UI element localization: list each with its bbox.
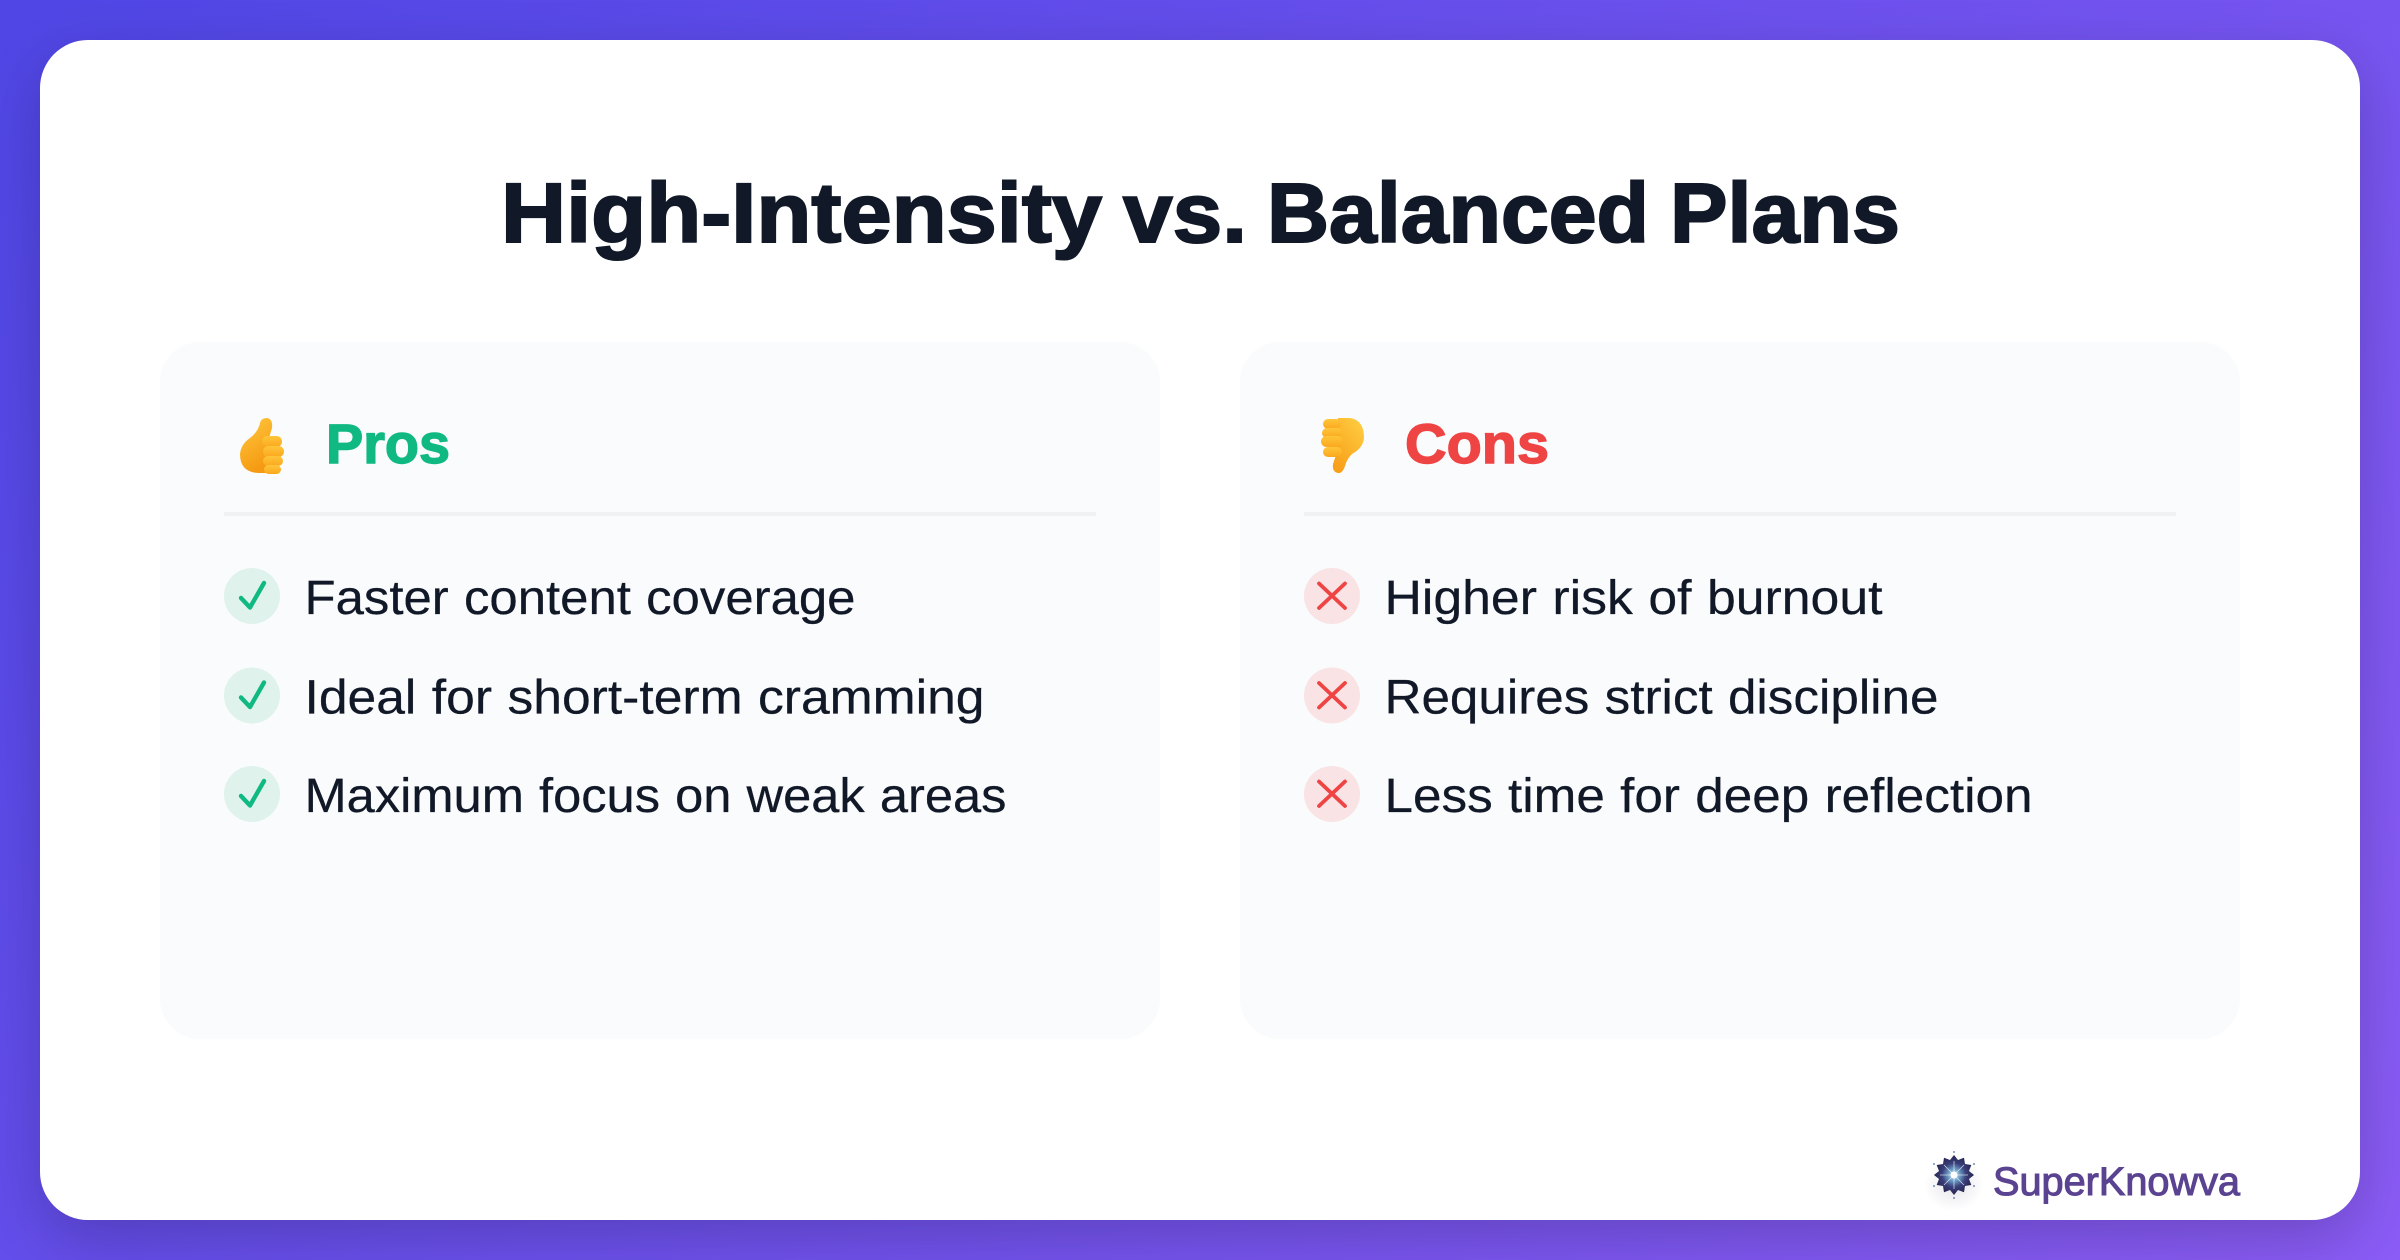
con item 1: Higher risk of burnout — [1384, 572, 1882, 625]
icon: thumbs down — [1321, 418, 1364, 473]
title: vs. — [1123, 166, 1247, 260]
panel: pros — [160, 342, 1160, 1039]
heading: cons: Cons — [1405, 412, 1549, 475]
icon: logo star — [1924, 1151, 1984, 1211]
title — [501, 166, 1900, 260]
icon: thumbs up — [240, 418, 284, 474]
title: Plans — [1670, 166, 1900, 260]
pro item 1: Faster content coverage — [304, 572, 856, 625]
con item 2: Requires strict discipline — [1384, 672, 1938, 724]
con item 3: Less time for deep reflection — [1384, 770, 2032, 823]
title: Balanced — [1267, 166, 1649, 260]
title: High-Intensity — [501, 166, 1102, 260]
heading: pros: Pros — [326, 412, 450, 475]
pro item 2: Ideal for short-term cramming — [304, 672, 984, 724]
brand name: SuperKnowva — [1993, 1160, 2241, 1204]
pro item 3: Maximum focus on weak areas — [304, 770, 1006, 823]
panel: cons — [1240, 342, 2240, 1039]
logo: SuperKnowva — [1924, 1151, 2241, 1211]
